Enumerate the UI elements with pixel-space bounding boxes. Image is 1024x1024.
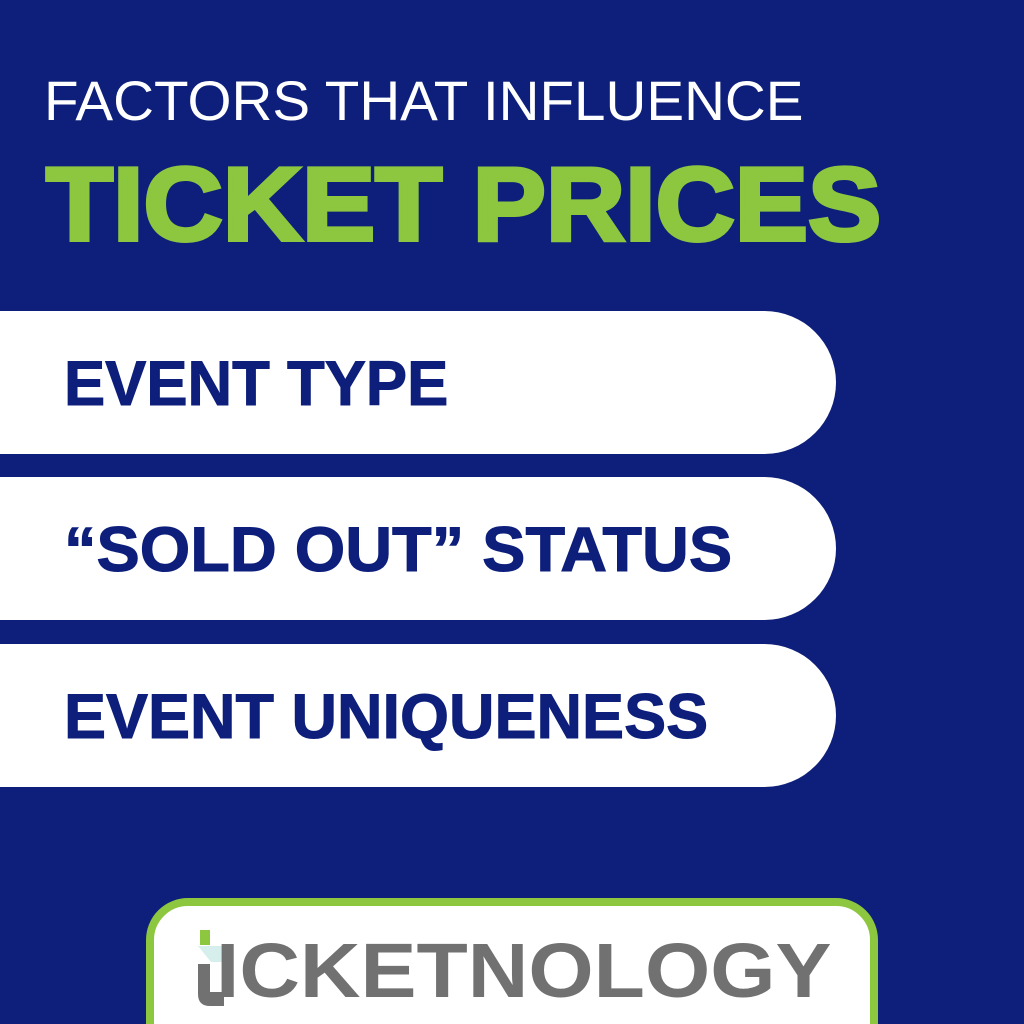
panel: event uniqueness: EVENT UNIQUENESS xyxy=(64,682,708,752)
panel: event type: EVENT TYPE xyxy=(64,349,448,419)
panel: event type xyxy=(0,311,836,454)
panel: event uniqueness xyxy=(0,644,836,787)
logo text: ICKETNOLOGY xyxy=(216,928,832,1014)
icon: ticket stub t xyxy=(198,930,224,1006)
logo: ticketnology xyxy=(146,898,878,1024)
panel: sold out status: “SOLD OUT” STATUS xyxy=(64,515,732,585)
title: ticket prices: TICKET PRICES xyxy=(46,147,881,263)
panel: sold out status xyxy=(0,477,836,620)
title: factors that influence: FACTORS THAT INFLUENCE xyxy=(44,69,804,132)
